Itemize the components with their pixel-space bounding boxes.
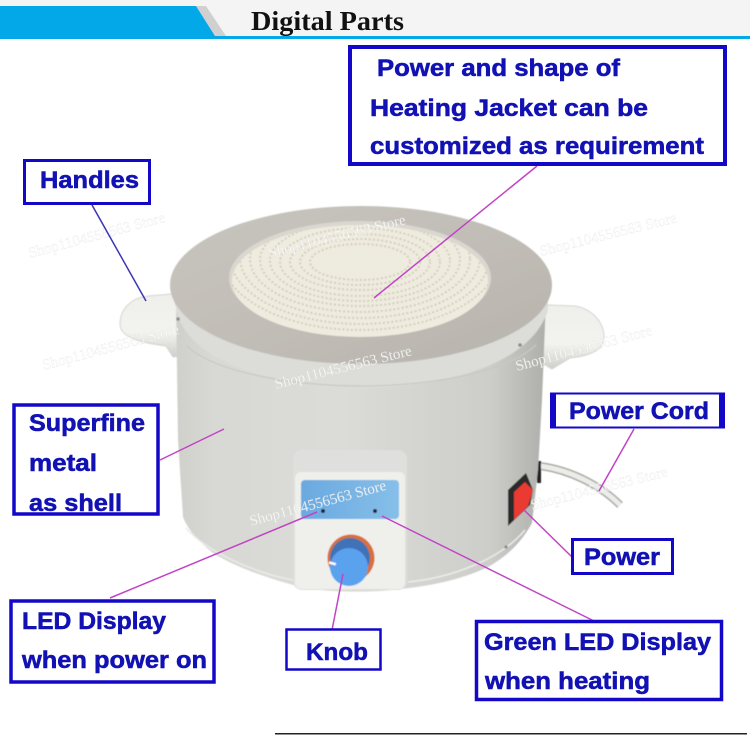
rivets: [176, 317, 180, 321]
cylinder body: [176, 300, 546, 592]
arrow: handles leader: [92, 205, 146, 301]
callout: customization: Power and shape of: [377, 55, 621, 82]
callout: LED display: LED Display: [22, 608, 167, 635]
callout: metal shell: metal: [29, 450, 97, 477]
arrow: heating jacket leader: [374, 166, 537, 298]
callout: power: [572, 540, 672, 574]
left handle: [120, 294, 186, 357]
callout: power cord: [550, 393, 725, 428]
callout: green LED display: [476, 622, 722, 700]
watermarks: Shop1104556563 Store: [514, 323, 654, 375]
callout: customization: [350, 47, 725, 164]
rim lower lip: [176, 300, 548, 388]
callout: knob: [286, 630, 380, 670]
title: Digital Parts: [251, 6, 404, 36]
control panel: [293, 450, 407, 590]
callout: metal shell: as shell: [29, 490, 122, 517]
power cord: [540, 466, 620, 505]
heating jacket device: [120, 178, 620, 592]
arrow: power cord leader: [599, 429, 634, 491]
callout: power: Power: [584, 544, 660, 571]
arrow: LED display leader: [110, 512, 317, 598]
arrow: metal shell leader: [160, 429, 224, 460]
watermarks: [27, 210, 679, 530]
watermarks: Shop1104556563 Store: [538, 210, 679, 260]
callout: handles: [24, 160, 150, 204]
callout: green LED display: Green LED Display: [484, 629, 712, 656]
callout: green LED display: when heating: [484, 668, 650, 695]
watermarks: Shop1104556563 Store: [273, 343, 414, 393]
watermarks: Shop1104556563 Store: [41, 322, 181, 374]
arrow: green LED leader: [382, 516, 596, 622]
right handle: [530, 305, 604, 369]
callout: LED display: [11, 601, 214, 682]
bottom rule: [275, 733, 747, 734]
callout: customization: customized as requirement: [370, 133, 704, 160]
top rim: [170, 206, 552, 364]
callout: LED display: when power on: [21, 647, 207, 674]
callout: customization: Heating Jacket can be: [370, 95, 648, 122]
callout: power cord: Power Cord: [569, 398, 709, 425]
watermarks: Shop1104556563 Store: [529, 464, 670, 514]
arrow: power switch leader: [524, 510, 572, 557]
callout: handles: Handles: [40, 167, 139, 194]
callout: knob: Knob: [306, 639, 368, 666]
watermarks: Shop1104556563 Store: [248, 478, 388, 530]
callout: metal shell: Superfine: [29, 410, 145, 437]
arrow: knob leader: [332, 574, 343, 630]
ceramic bore: [229, 221, 492, 338]
header banner: [0, 0, 750, 39]
knob: [328, 534, 374, 586]
watermarks: Shop1104556563 Store: [27, 210, 167, 262]
watermarks: Shop1104556563 Store: [267, 212, 408, 262]
callout: metal shell: [14, 405, 158, 517]
panel label: [301, 480, 399, 519]
LED lights: [321, 509, 325, 513]
rocker switch: [508, 473, 533, 526]
